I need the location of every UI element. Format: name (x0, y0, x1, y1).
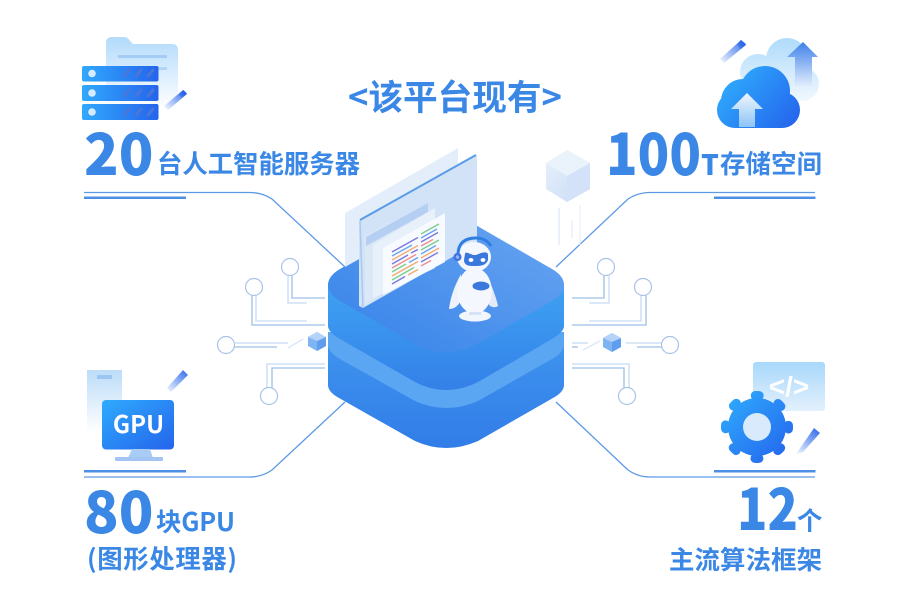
platform bottom layer (328, 345, 564, 448)
robot wings (449, 274, 461, 309)
platform top face (328, 214, 564, 352)
circuit lines: right (572, 258, 678, 404)
connector: top left (84, 192, 345, 267)
holographic screens (345, 148, 477, 308)
number: 80: 80 (84, 468, 153, 550)
circuit lines: left (218, 258, 326, 404)
isometric platform (328, 214, 564, 448)
back screen (345, 148, 458, 267)
back cloud (740, 38, 819, 102)
robot base (459, 310, 491, 322)
number: 12: 12 (737, 465, 798, 547)
rule (84, 196, 186, 199)
icon: small cube left (308, 332, 326, 351)
rule (84, 470, 186, 472)
connector: bottom right (556, 402, 815, 477)
robot headset (458, 238, 491, 255)
label: frameworks: 主流算法框架 (669, 541, 822, 577)
robot head (457, 242, 491, 272)
icon: gear and code window (726, 362, 825, 458)
icon: gear and code window: </> (769, 371, 809, 402)
block: 80 GPUs (84, 370, 237, 576)
code window (383, 213, 445, 295)
robot (449, 238, 498, 322)
label: servers: 台人工智能服务器 (157, 145, 361, 181)
icon: small cube right (603, 333, 621, 352)
floating cube (546, 150, 590, 245)
number: 20: 20 (84, 110, 153, 192)
front screen (359, 155, 477, 308)
platform light band (328, 332, 564, 408)
platform top layer side (328, 285, 564, 390)
title: <该平台现有> (348, 70, 562, 121)
label: graphics processor: (图形处理器) (87, 540, 237, 576)
unit: T: T (701, 144, 719, 184)
label: GPU: 块GPU (156, 503, 235, 539)
robot body (457, 267, 492, 312)
window stack (365, 203, 428, 304)
icon: GPU monitor: GPU (113, 405, 164, 440)
label: storage: 存储空间 (720, 145, 822, 181)
block: 100T storage (606, 38, 822, 199)
icon: GPU monitor (87, 370, 188, 461)
block: 20 servers (82, 37, 361, 199)
rule (714, 196, 816, 199)
unit: 个: 个 (797, 502, 822, 538)
connector: bottom left (84, 402, 345, 477)
icon: folder and servers (82, 37, 187, 120)
rule (714, 470, 816, 472)
number: 100: 100 (606, 110, 701, 192)
front cloud (717, 66, 800, 128)
icon: cloud upload (717, 38, 819, 128)
block: 12 frameworks (669, 362, 825, 577)
connector: top right (556, 192, 815, 267)
